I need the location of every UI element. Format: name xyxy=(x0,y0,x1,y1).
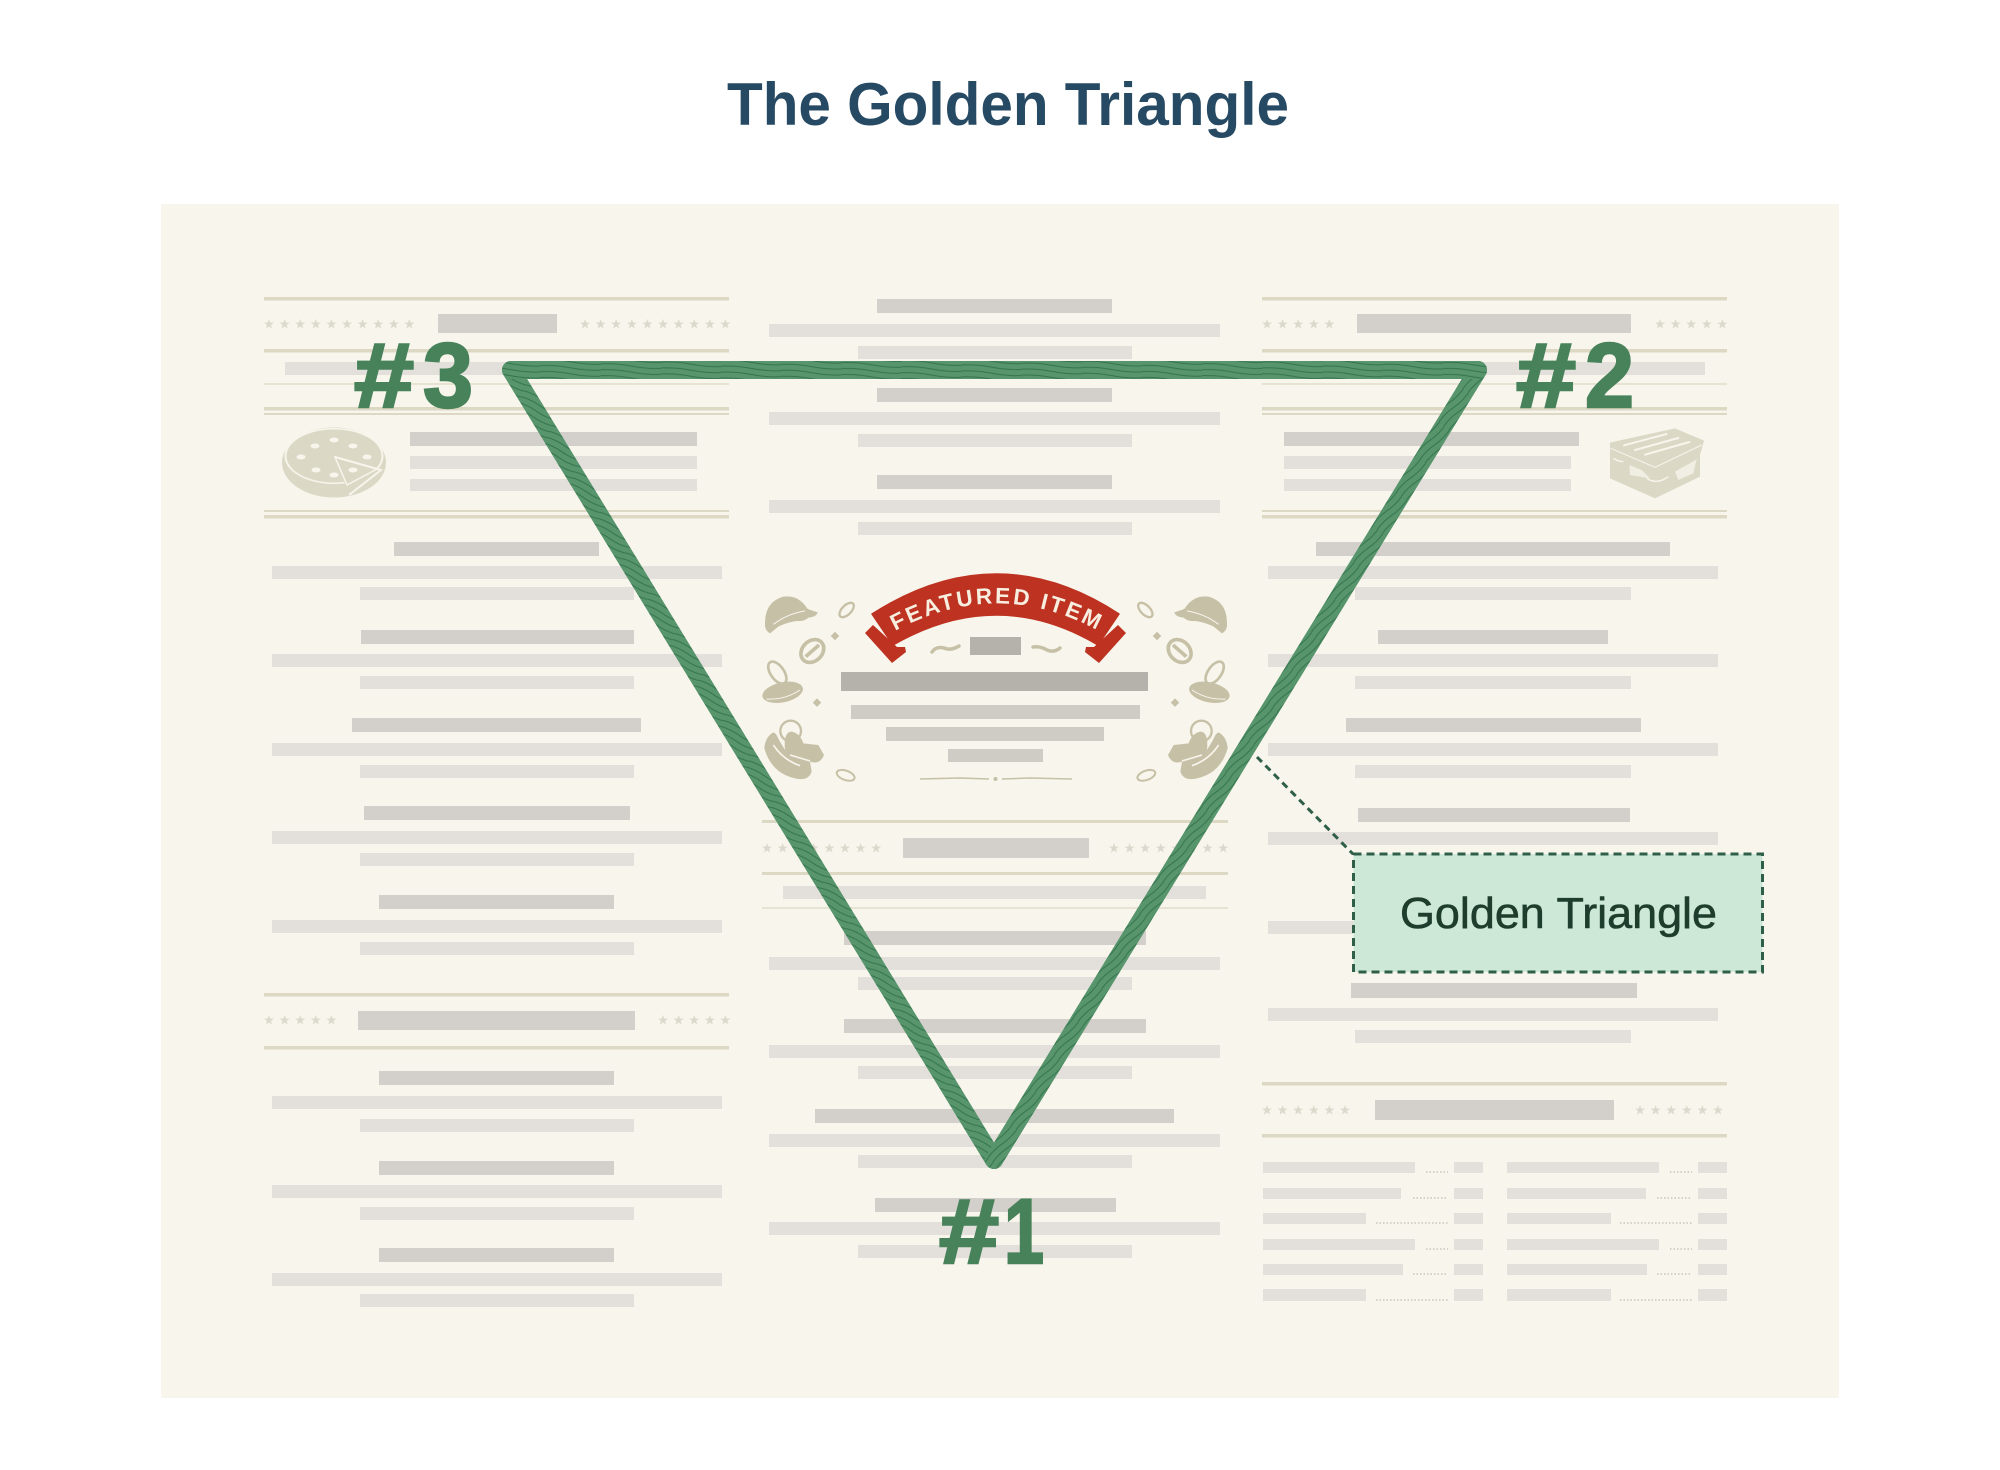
center column lower items xyxy=(769,931,1220,1258)
golden triangle outline xyxy=(511,370,1478,1160)
label: #3: # xyxy=(354,325,414,427)
callout: Golden Triangle xyxy=(1354,854,1762,972)
label: #3 xyxy=(354,325,473,427)
callout leader line xyxy=(1257,757,1353,854)
ribbon banner xyxy=(865,573,1126,663)
left column menu items xyxy=(272,542,722,955)
label: #2: # xyxy=(1516,325,1576,427)
right column menu items xyxy=(1268,542,1718,1043)
center column section header xyxy=(762,820,1229,909)
panel: menu background xyxy=(161,204,1839,1398)
featured text bars xyxy=(841,637,1148,781)
label: #1: 1 xyxy=(1004,1181,1044,1283)
title: The Golden Triangle xyxy=(727,71,1289,138)
icon: pizza xyxy=(282,428,386,498)
left column header xyxy=(264,297,731,415)
left column second section xyxy=(264,993,731,1307)
label: #1: # xyxy=(939,1181,999,1283)
right column header xyxy=(1262,297,1729,415)
callout: Golden Triangle: Golden Triangle xyxy=(1400,889,1717,938)
right menu column xyxy=(1262,297,1729,1301)
food ornaments left xyxy=(760,596,856,783)
left menu column xyxy=(264,297,731,1307)
label: #2 xyxy=(1516,325,1634,427)
label: #2: 2 xyxy=(1585,325,1634,427)
right column price list xyxy=(1262,1082,1727,1301)
center menu column xyxy=(762,299,1230,1258)
ribbon banner: FEATURED ITEM xyxy=(889,588,1102,630)
label: #1 xyxy=(939,1181,1044,1283)
right column featured text block xyxy=(1262,432,1727,518)
label: #3: 3 xyxy=(423,325,473,427)
featured item block xyxy=(762,573,1230,782)
food ornaments right xyxy=(1136,596,1232,783)
center column top items xyxy=(769,299,1220,535)
icon: sandwich xyxy=(1610,428,1704,498)
left column featured text block xyxy=(264,432,729,518)
